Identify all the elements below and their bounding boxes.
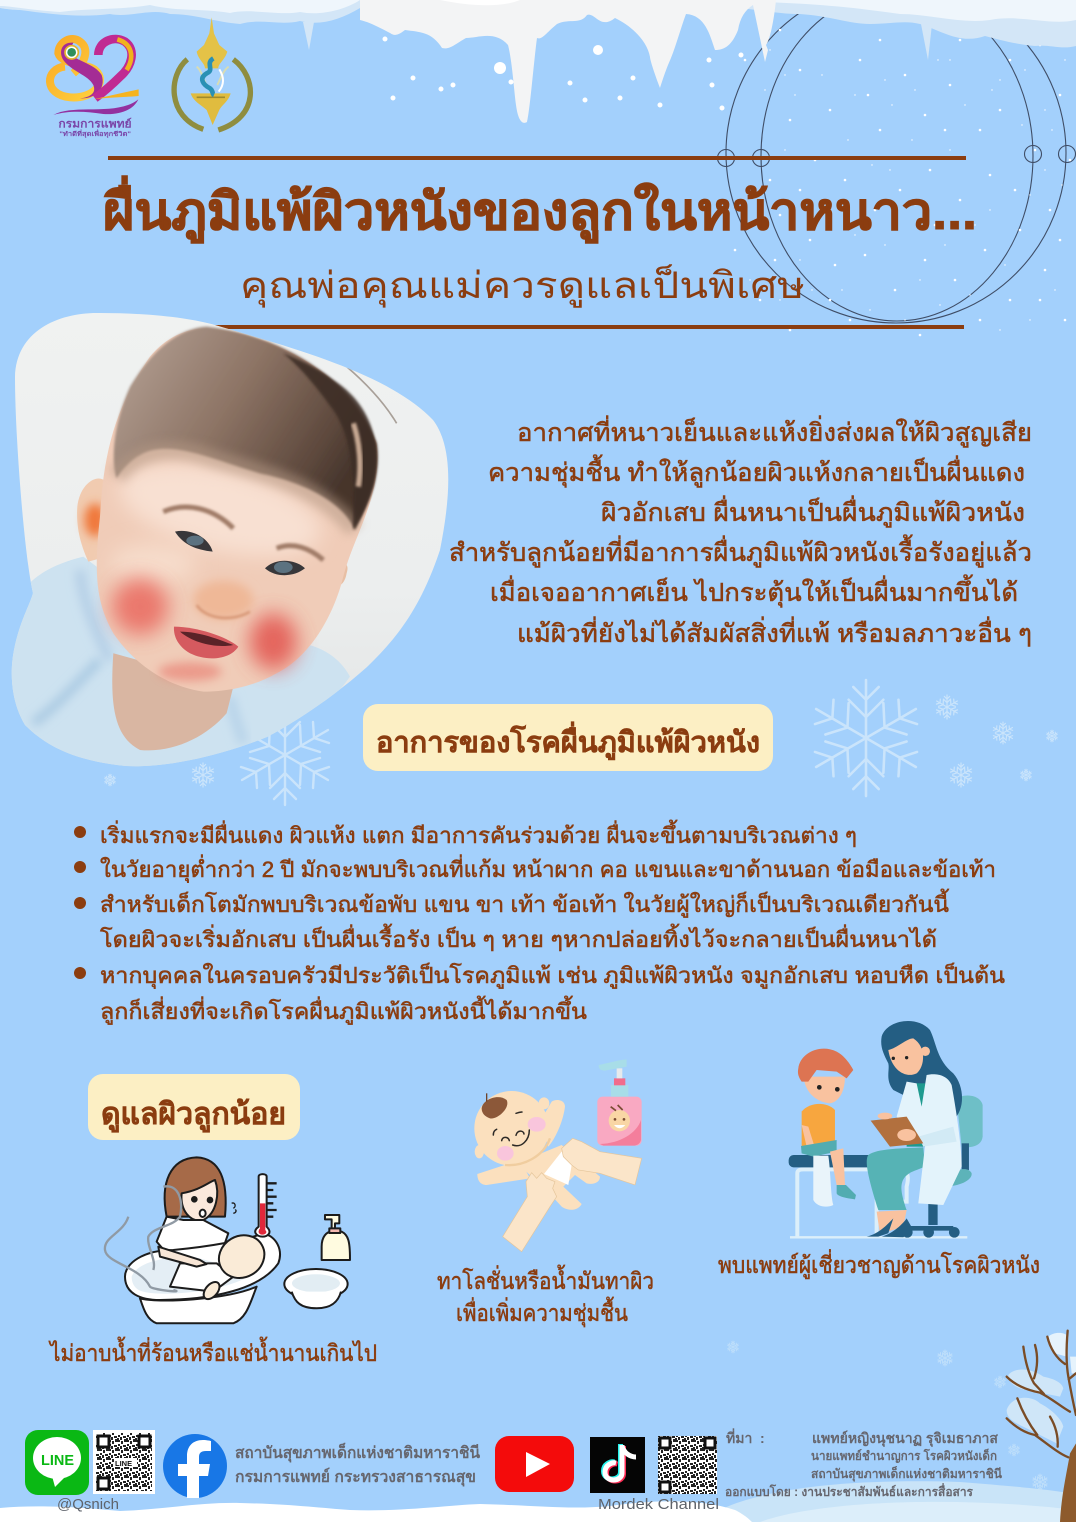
intro paragraph: สำหรับลูกน้อยที่มีอาการผื่นภูมิแพ้ผิวหนังเรื้อรังอยู่แล้ว — [449, 534, 1032, 568]
heading: baby skin care: ดูแลผิวลูกน้อย — [101, 1098, 286, 1133]
neck — [112, 653, 233, 750]
footer: institute name: สถาบันสุขภาพเด็กแห่งชาติมหาราชินี — [235, 1441, 480, 1463]
photo: baby with eczema on cheeks — [12, 313, 448, 766]
heading: baby skin care — [88, 1074, 300, 1140]
footer: LINE QR code: LINE — [115, 1459, 132, 1468]
intro paragraph: เมื่อเจออากาศเย็น ไปกระตุ้นให้เป็นผื่นมากขึ้นได้ — [490, 574, 1018, 608]
logo: 82nd anniversary Department of Medical Services — [50, 39, 139, 138]
nose — [193, 581, 253, 619]
footer: institute name: กรมการแพทย์ กระทรวงสาธารณสุข — [235, 1467, 476, 1487]
footer: source credit: : — [760, 1430, 765, 1446]
caption: lotion — [437, 1265, 654, 1327]
symptom list: เริ่มแรกจะมีผื่นแดง ผิวแห้ง แตก มีอาการคันร่วมด้วย ผื่นจะขึ้นตามบริเวณต่าง ๆ — [100, 820, 857, 848]
small snowflakes — [105, 680, 1057, 805]
caption: bathing: ไม่อาบน้ำที่ร้อนหรือแช่น้ำนานเกินไป — [48, 1337, 377, 1366]
face — [97, 328, 378, 692]
logo: 82nd anniversary Department of Medical Services: กรมการแพทย์ — [58, 117, 132, 130]
snow drips at the top — [0, 0, 1076, 123]
intro paragraph: ผิวอักเสบ ผื่นหนาเป็นผื่นภูมิแพ้ผิวหนัง — [601, 495, 1025, 528]
intro paragraph: ความชุ่มชื้น ทำให้ลูกน้อยผิวแห้งกลายเป็นผื่นแดง — [488, 454, 1025, 488]
caption: lotion: ทาโลชั่นหรือน้ำมันทาผิว — [437, 1265, 654, 1294]
symptom list: หากบุคคลในครอบครัวมีประวัติเป็นโรคภูมิแพ้ เช่น ภูมิแพ้ผิวหนัง จมูกอักเสบ หอบหืด เป็นต้น — [100, 961, 1005, 989]
footer: YouTube icon — [495, 1436, 574, 1492]
symptom list: สำหรับเด็กโตมักพบบริเวณข้อพับ แขน ขา เท้า ข้อเท้า ในวัยผู้ใหญ่ก็เป็นบริเวณเดียวกันนี้ — [100, 889, 949, 918]
title: ผื่นภูมิแพ้ผิวหนังของลูกในหน้าหนาว... — [103, 176, 977, 244]
caption: see a doctor: พบแพทย์ผู้เชี่ยวชาญด้านโรคผิวหนัง — [718, 1249, 1040, 1279]
tree with snow — [1007, 1331, 1076, 1522]
chair — [957, 1095, 983, 1147]
footer: channel name: Mordek Channel — [598, 1496, 719, 1513]
footer: LINE id: @Qsnich — [57, 1496, 119, 1513]
clothes — [0, 557, 350, 777]
footer: Facebook icon — [163, 1434, 227, 1498]
illustration: applying lotion to baby — [474, 1059, 642, 1252]
symptom list: ลูกก็เสี่ยงที่จะเกิดโรคผื่นภูมิแพ้ผิวหนังนี้ได้มากขึ้น — [100, 996, 587, 1025]
footer: institute name — [235, 1441, 480, 1487]
snow speckles — [735, 30, 1070, 335]
intro paragraph — [449, 415, 1032, 648]
footer: LINE icon — [25, 1430, 89, 1495]
footer: source credit: ที่มา — [726, 1428, 752, 1446]
faint lower snowflakes — [728, 1341, 1047, 1490]
footer: source credit: แพทย์หญิงนุชนาฏ รุจิเมธาภาส — [812, 1430, 998, 1447]
hair — [114, 327, 378, 530]
symptom list — [74, 820, 1005, 1025]
footer: source credit: ออกแบบโดย : งานประชาสัมพันธ์และการสื่อสาร — [725, 1483, 973, 1499]
eyes — [175, 531, 213, 552]
title rules — [108, 156, 966, 329]
symptom list: ในวัยอายุต่ำกว่า 2 ปี มักจะพบบริเวณที่แก้ม หน้าผาก คอ แขนและขาด้านนอก ข้อมือและข้อเท้า — [100, 854, 996, 883]
logo: Queen Sirikit institute emblem — [174, 17, 250, 130]
snow ground — [0, 1481, 1076, 1522]
heading: symptoms: อาการของโรคผื่นภูมิแพ้ผิวหนัง — [376, 721, 760, 760]
doctor hair — [881, 1021, 962, 1120]
intro paragraph: แม้ผิวที่ยังไม่ได้สัมผัสสิ่งที่แพ้ หรือมลภาวะอื่น ๆ — [517, 616, 1032, 648]
footer: LINE icon: LINE — [41, 1452, 74, 1469]
footer: TikTok icon — [590, 1437, 645, 1493]
mouth — [174, 627, 238, 658]
clipboard — [871, 1117, 923, 1147]
ear — [77, 478, 104, 562]
illustration: doctor examining boy — [789, 1021, 983, 1238]
legs — [867, 1147, 925, 1210]
illustration: mother bathing baby — [105, 1157, 350, 1323]
footer: source credit: สถาบันสุขภาพเด็กแห่งชาติมหาราชินี — [811, 1466, 1002, 1482]
rash cheeks — [112, 578, 168, 635]
caption: lotion: เพื่อเพิ่มความชุ่มชื้น — [456, 1297, 628, 1327]
logo: 82nd anniversary Department of Medical Services: "ทำดีที่สุดเพื่อทุกชีวิต" — [59, 129, 131, 138]
coat — [907, 1083, 927, 1147]
intro paragraph: อากาศที่หนาวเย็นและแห้งยิ่งส่งผลให้ผิวสูญเสีย — [517, 415, 1032, 448]
symptom list: โดยผิวจะเริ่มอักเสบ เป็นผื่นเรื้อรัง เป็น ๆ หาย ๆหากปล่อยทิ้งไว้จะกลายเป็นผื่นหนาได้ — [100, 924, 937, 952]
subtitle: คุณพ่อคุณแม่ควรดูแลเป็นพิเศษ — [240, 262, 805, 308]
footer: source credit — [725, 1428, 1002, 1499]
heading: symptoms — [363, 704, 773, 771]
boy — [803, 1077, 845, 1103]
footer: LINE QR code — [93, 1430, 155, 1494]
footer: source credit: นายแพทย์ชำนาญการ โรคผิวหนังเด็ก — [811, 1448, 997, 1463]
brows — [163, 507, 233, 528]
decorative circles — [718, 0, 1076, 323]
footer: TikTok QR code — [658, 1436, 717, 1494]
